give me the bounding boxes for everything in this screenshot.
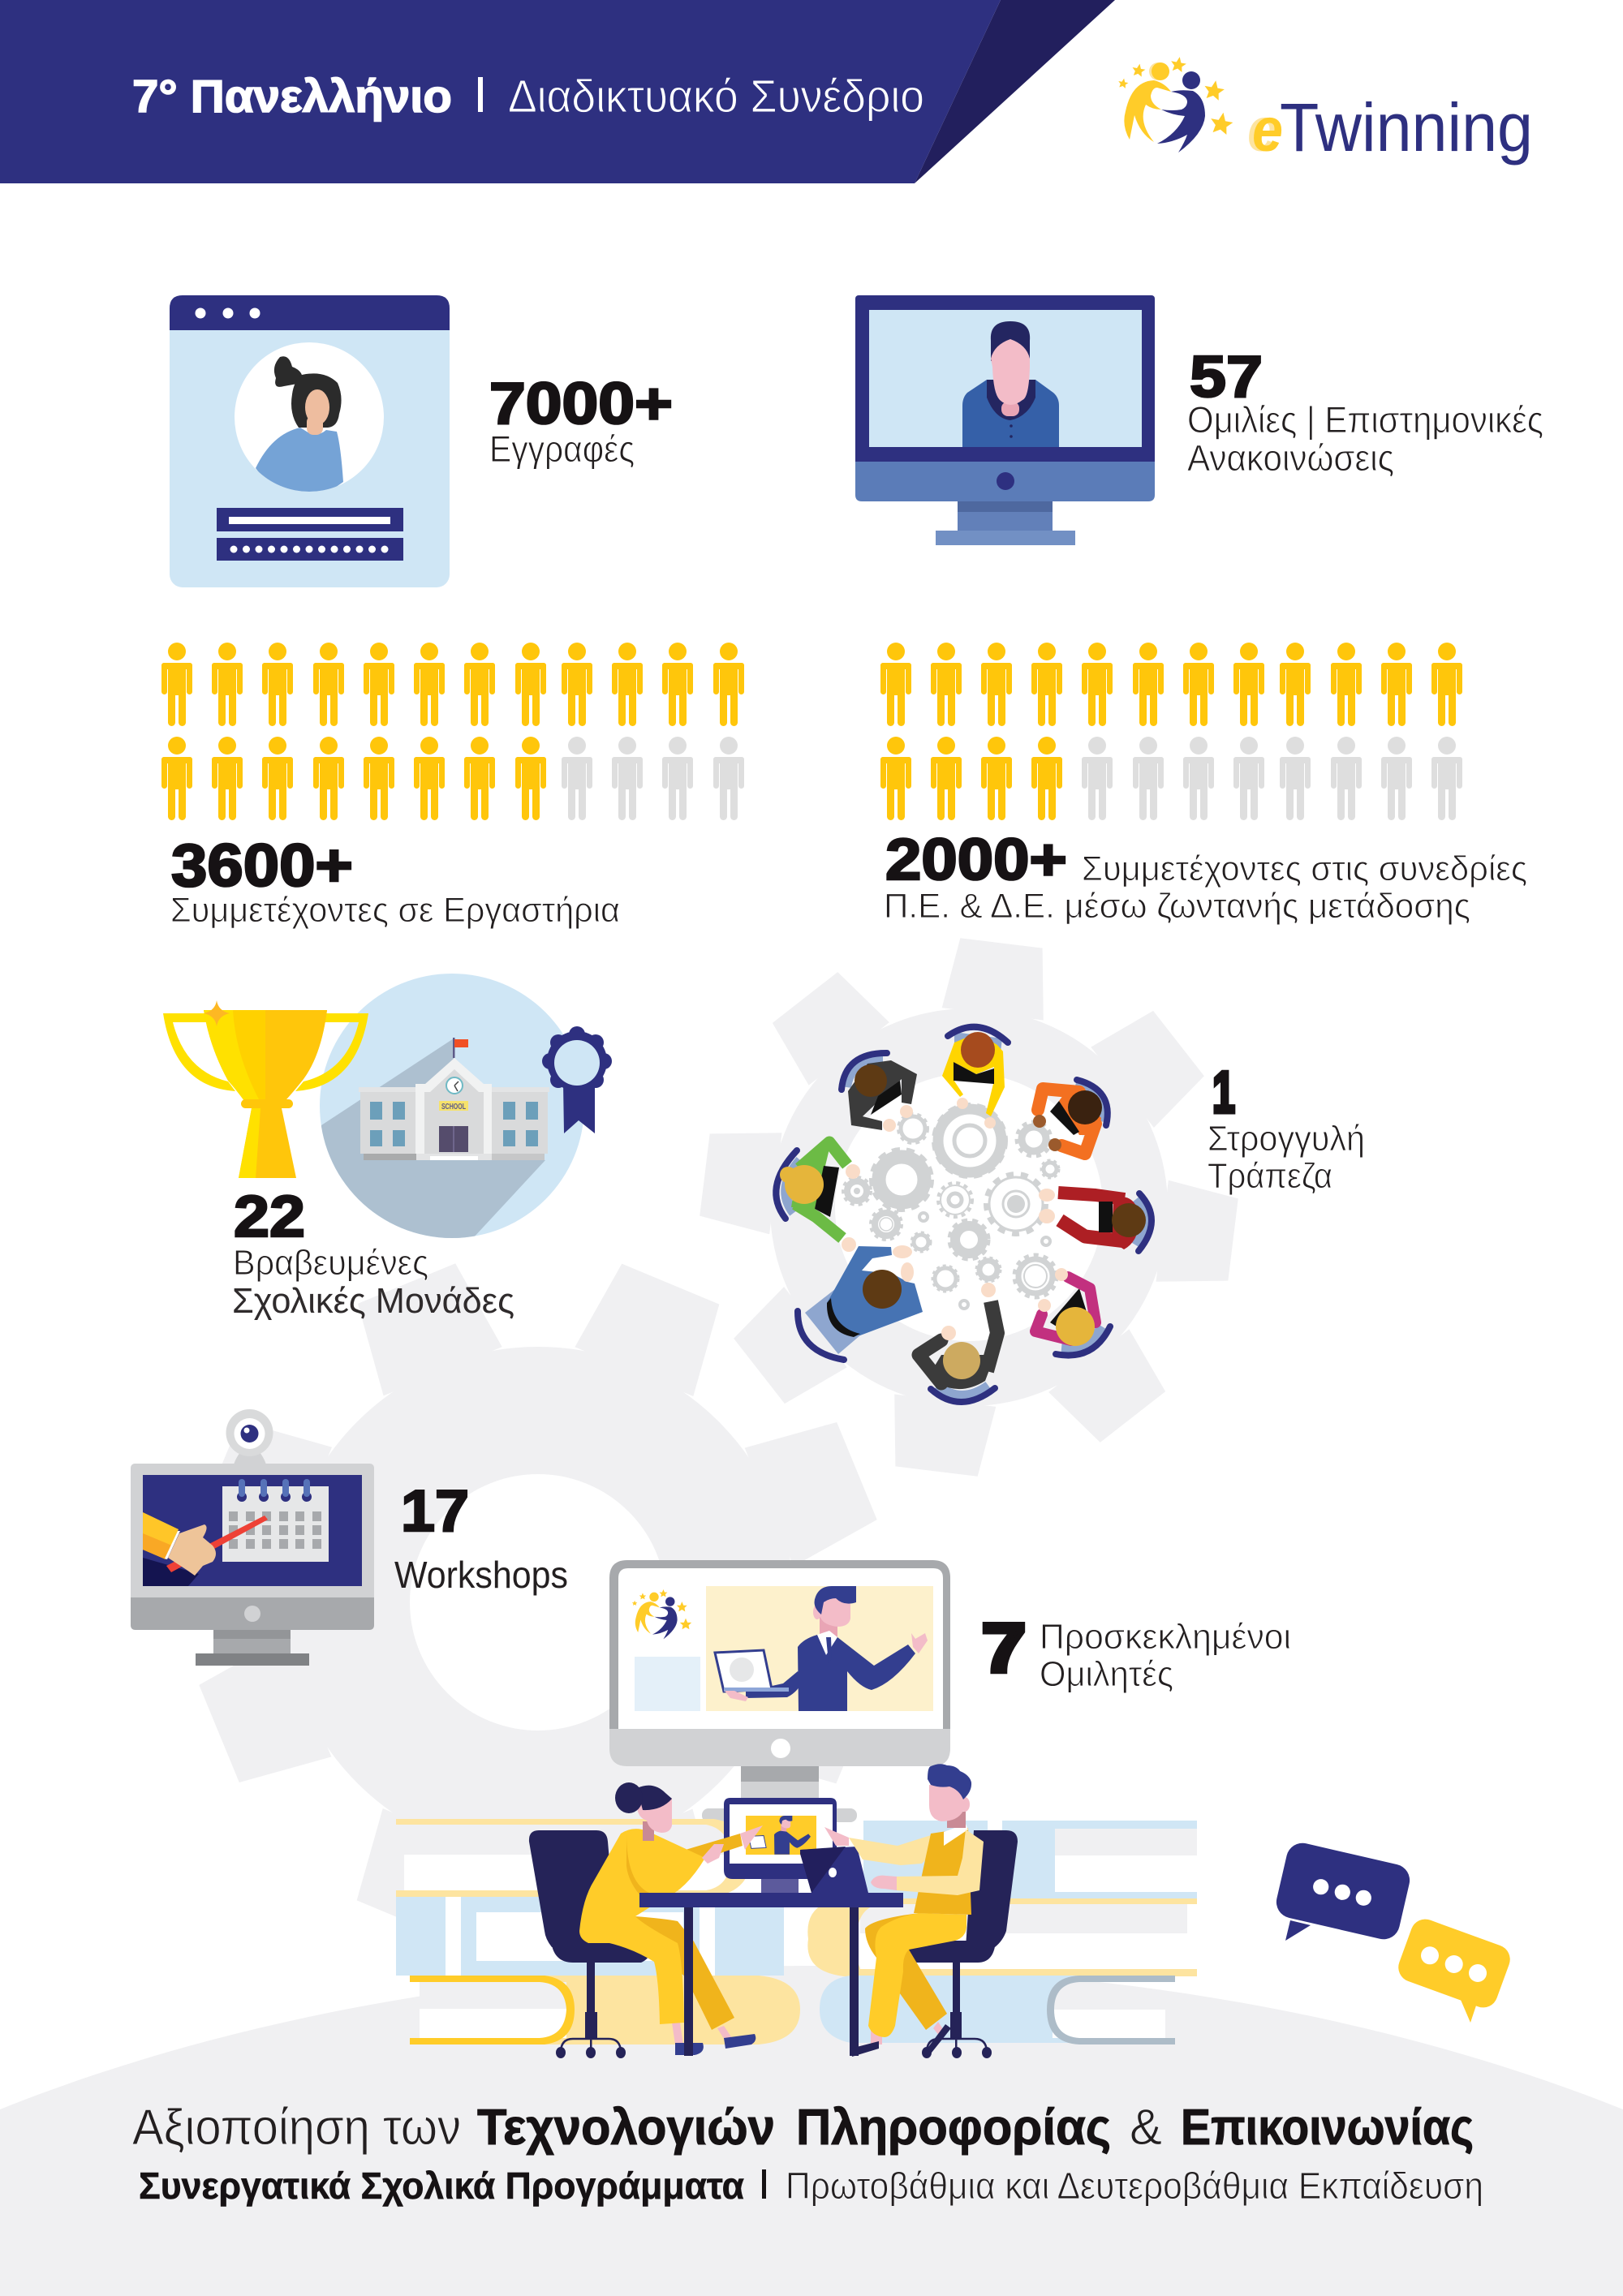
logo icon [1117, 56, 1234, 153]
stat: 22 awarded schools: Σχολικές Μονάδες [232, 1281, 514, 1321]
stat: 7000+ registrations: 7000+ [489, 372, 673, 436]
mini logo [632, 1589, 691, 1639]
stat: 57 talks: 57 [1190, 345, 1263, 410]
person: blue lower left [798, 1245, 923, 1360]
woman's chair [529, 1830, 651, 2058]
illustration: desk [639, 1893, 903, 2056]
ground curve [0, 1966, 1623, 2296]
icon: webcam [226, 1409, 273, 1475]
person: dark suit top left [842, 1053, 917, 1132]
stat: 1 round table: Τράπεζα [1208, 1156, 1332, 1196]
stat: 7 keynote speakers: Ομιλητές [1040, 1654, 1173, 1694]
man's near leg [868, 1913, 966, 2037]
footer subheading: Πρωτοβάθμια και Δευτεροβάθμια Εκπαίδευση [786, 2165, 1483, 2207]
stat: 3600+ workshop participants: Συμμετέχοντες σε Εργαστήρια [170, 891, 620, 930]
decorative gear: large left [195, 1259, 881, 1946]
logo wordmark: e [1247, 96, 1278, 165]
stat: 2000+ live stream participants: Π.Ε. & Δ.Ε. μέσω ζωντανής μετάδοσης [884, 887, 1470, 926]
icon: school building: SCHOOL [441, 1103, 466, 1111]
panel: award winning school illustration [163, 974, 612, 1249]
illustration: stacked books [396, 1819, 1197, 2044]
icon: hand with pointer [143, 1512, 268, 1586]
woman's hands [702, 1825, 763, 1864]
footer subheading [139, 2165, 1483, 2207]
icon: woman avatar [256, 356, 343, 495]
man's far arm [849, 1832, 941, 1865]
stat: 1 round table [1208, 1060, 1365, 1196]
footer heading: Πληροφορίας [796, 2100, 1111, 2156]
panel: workshops monitor with webcam [131, 1409, 374, 1666]
footer subheading: Συνεργατικά Σχολικά Προγράμματα [139, 2165, 744, 2207]
panel: speaker monitor icon [855, 295, 1155, 545]
panel: keynote speakers monitor [609, 1560, 950, 1822]
woman's far leg [635, 1916, 734, 2030]
woman's far arm [659, 1834, 743, 1870]
illustration: man at desk [824, 1764, 1018, 2058]
stat: 3600+ workshop participants [170, 832, 620, 930]
icon: yellow speech bubble [1394, 1915, 1514, 2023]
stat: 7 keynote speakers: 7 [982, 1610, 1026, 1686]
eTwinning logo [1117, 56, 1533, 166]
stat: 22 awarded schools: 22 [234, 1185, 305, 1249]
stat: 17 workshops [394, 1479, 568, 1596]
woman's head [615, 1782, 672, 1841]
man's head [928, 1764, 971, 1828]
stat: 2000+ live stream participants: Συμμετέχοντες στις συνεδρίες [1082, 849, 1527, 888]
person: orange top right [1033, 1080, 1108, 1154]
panel: registrations form icon [170, 295, 450, 587]
icon: calendar [222, 1479, 329, 1562]
footer heading: Αξιοποίηση των [132, 2100, 461, 2156]
stat: 2000+ live stream participants [884, 828, 1527, 926]
stat: 1 round table: 1 [1212, 1060, 1235, 1125]
pictogram: left participants [161, 643, 744, 820]
footer heading [132, 2100, 1474, 2156]
stat: 17 workshops: 17 [401, 1479, 469, 1544]
logo wordmark: e [1252, 96, 1283, 165]
title: 7° Πανελλήνιο [132, 71, 452, 123]
stat: 7 keynote speakers [982, 1610, 1291, 1694]
footer heading: Τεχνολογιών [477, 2100, 775, 2156]
stat: 57 talks [1187, 345, 1543, 479]
man's shoes [850, 2024, 951, 2057]
man's chair [905, 1830, 1018, 2058]
mini presenter [748, 1816, 811, 1855]
panel: round table illustration [776, 1027, 1152, 1402]
icon: blue speech bubble [1273, 1840, 1413, 1942]
long shadow [321, 1038, 545, 1249]
title [132, 71, 924, 123]
stat: 7000+ registrations [489, 372, 673, 470]
person: magenta lower right [1035, 1268, 1110, 1356]
footer heading: Επικοινωνίας [1181, 2100, 1474, 2156]
stat: 1 round table: Στρογγυλή [1208, 1119, 1365, 1159]
person: green left [776, 1142, 860, 1252]
woman's torso and near leg [579, 1829, 705, 2024]
stat: 17 workshops: Workshops [394, 1554, 568, 1596]
person: red right [1039, 1189, 1152, 1251]
illustration: woman at desk [529, 1782, 763, 2058]
stat: 3600+ workshop participants: 3600+ [171, 832, 353, 899]
footer heading: & [1130, 2100, 1162, 2156]
title: Διαδικτυακό Συνέδριο [508, 71, 924, 123]
icon: school building [359, 1038, 549, 1160]
man's hands [824, 1827, 897, 1890]
icon: speaker on screen [962, 321, 1059, 447]
pictogram: right participants [880, 643, 1462, 820]
stat: 7000+ registrations: Εγγραφές [489, 428, 635, 470]
stat: 57 talks: Ανακοινώσεις [1187, 437, 1394, 479]
stat: 2000+ live stream participants: 2000+ [885, 828, 1067, 892]
person: yellow top [942, 1027, 1008, 1129]
icon: ribbon rosette [542, 1026, 612, 1133]
man's torso [914, 1828, 971, 1915]
person: dark suit bottom [919, 1283, 997, 1402]
stat: 22 awarded schools [232, 1185, 514, 1321]
header banner [0, 0, 1115, 183]
icon: trophy [163, 1000, 368, 1178]
presenter on screen [715, 1586, 928, 1711]
man's near arm [897, 1829, 984, 1895]
man's far leg [865, 1913, 947, 2030]
illustration: laptop [800, 1847, 868, 1893]
illustration: small desktop monitor [724, 1798, 837, 1893]
logo wordmark: Twinning [1280, 89, 1533, 166]
stat: 57 talks: Ομιλίες | Επιστημονικές [1187, 399, 1543, 441]
stat: 22 awarded schools: Βραβευμένες [233, 1243, 428, 1283]
gears on the table [843, 1105, 1059, 1309]
stat: 7 keynote speakers: Προσκεκλημένοι [1040, 1617, 1291, 1657]
decorative gear: behind round table [699, 937, 1239, 1477]
